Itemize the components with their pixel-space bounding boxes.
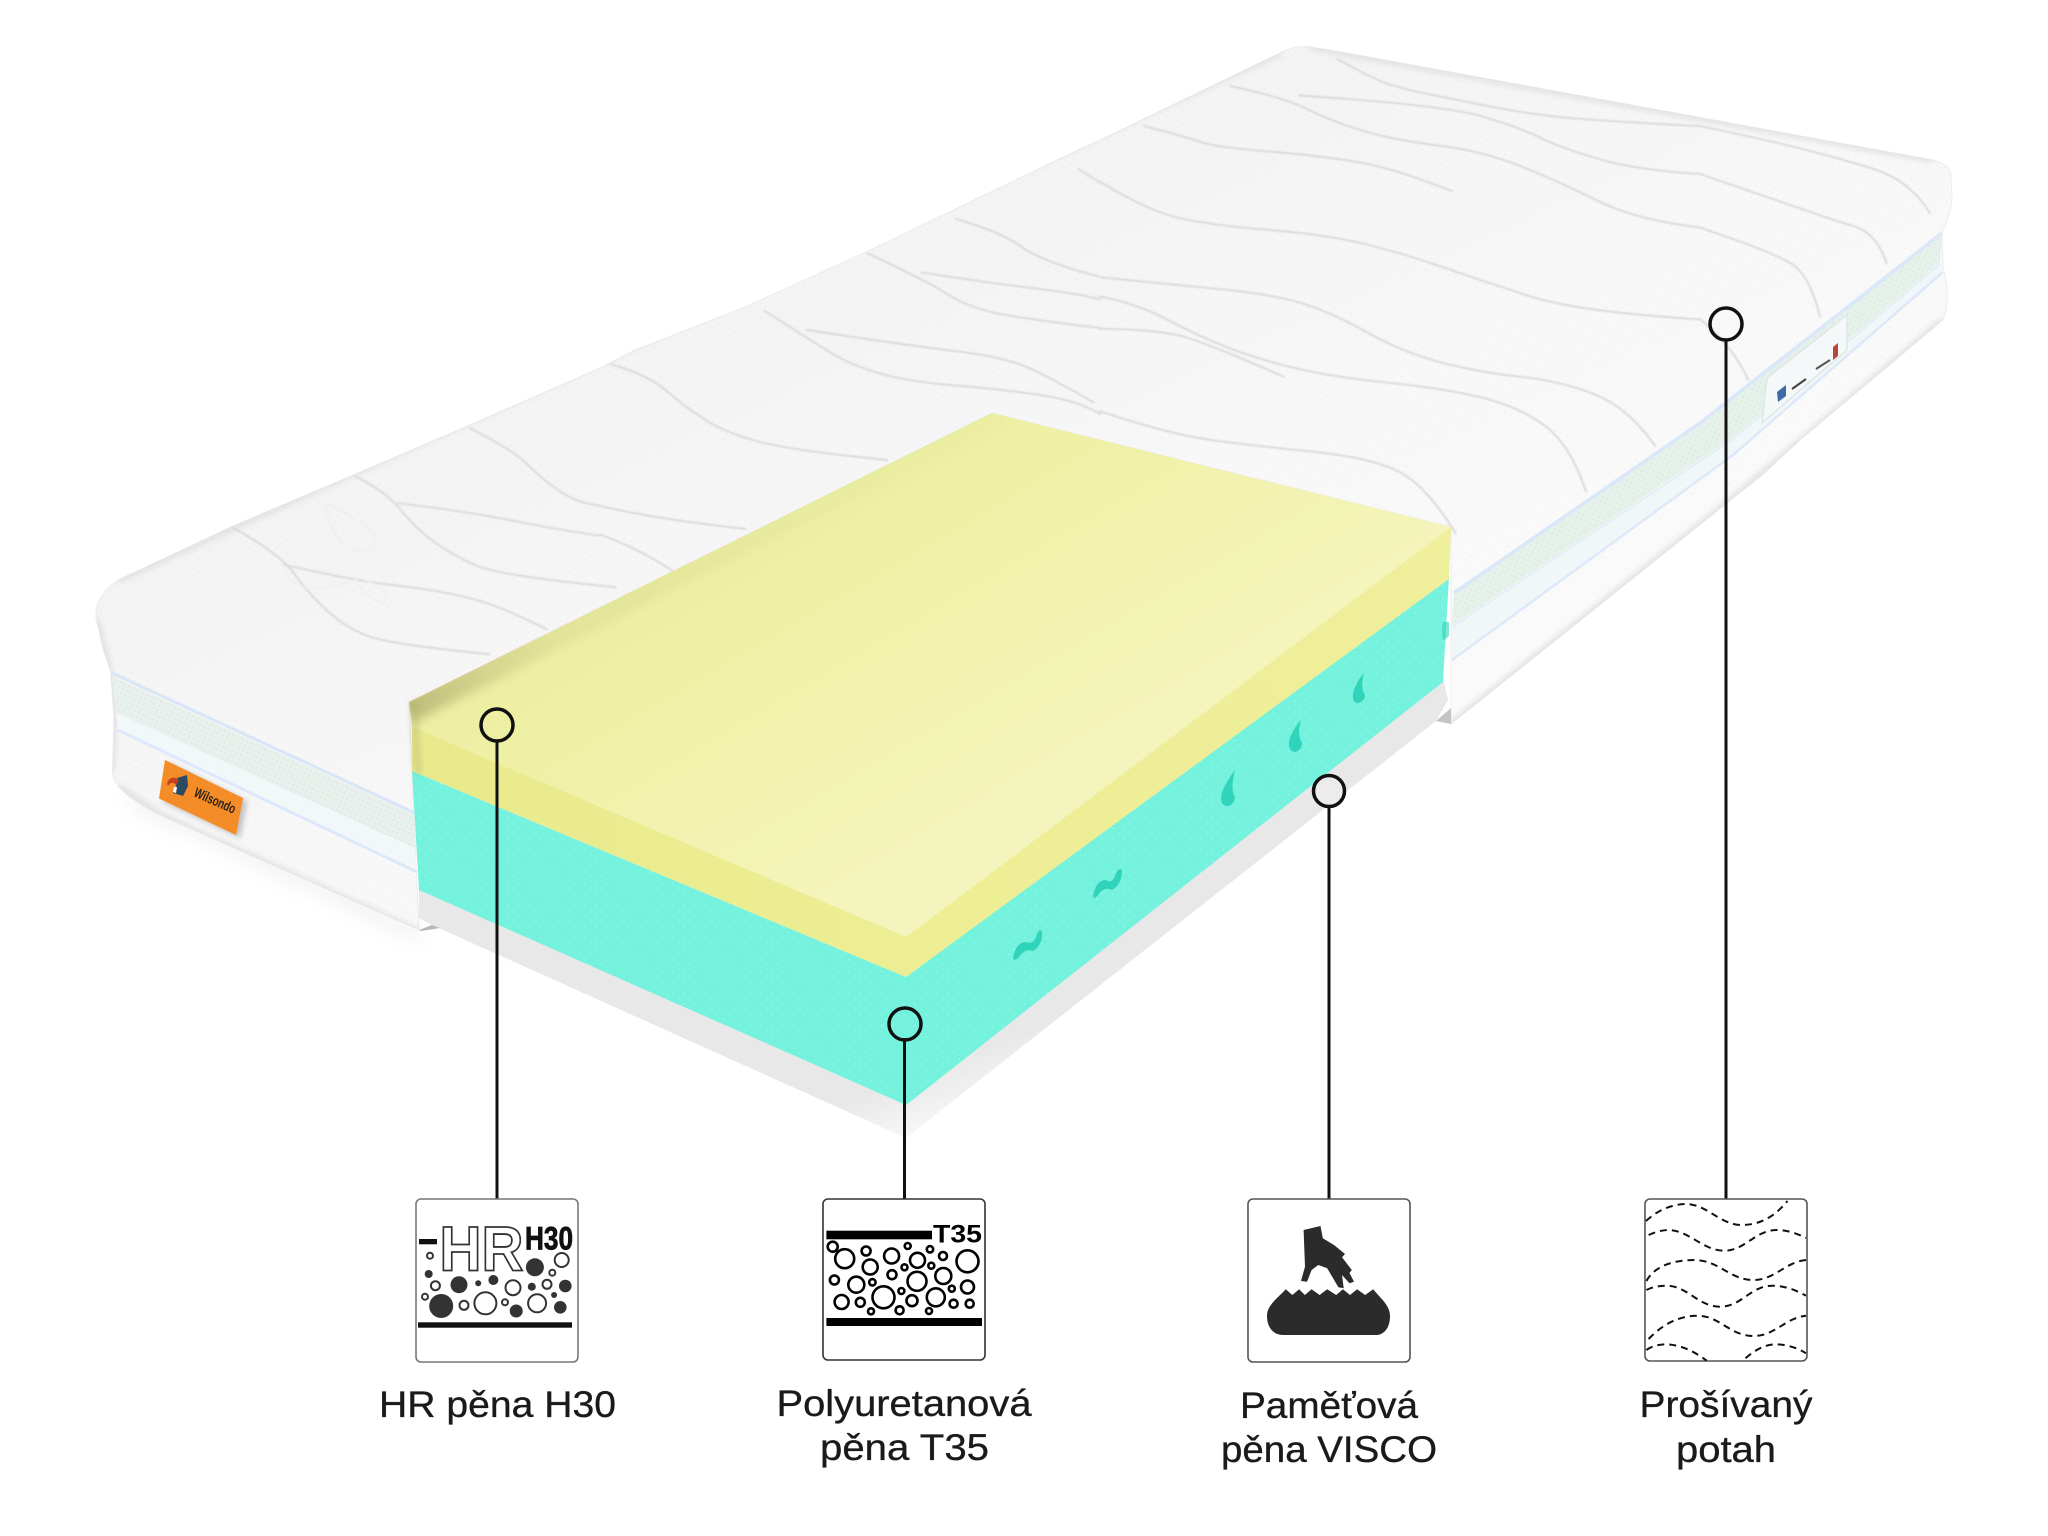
back edge shadow on top face (409, 588, 648, 724)
care tag on side (1762, 315, 1847, 423)
panel: memory foam VISCO (1221, 1199, 1437, 1470)
icon: T35 foam: T35 (933, 1220, 982, 1248)
quilting wave lines (233, 59, 1930, 654)
icon: hand pressing memory foam (1248, 1199, 1410, 1362)
label: Polyuretanová pěna T35 (776, 1383, 1032, 1468)
foam holes (1013, 622, 1449, 960)
icon: T35 foam (823, 1199, 985, 1360)
panel: HR foam H30 (379, 1199, 616, 1425)
cutaway: yellow HR foam side band (412, 527, 1451, 977)
callout: memory foam marker (1314, 776, 1344, 1200)
label: Prošívaný potah: Prošívaný (1640, 1384, 1813, 1425)
cutaway: yellow top face (409, 413, 1451, 937)
icon: toucan logo (167, 775, 188, 796)
callout: quilted cover marker (1710, 308, 1742, 1200)
icon: quilted stitching (1645, 1199, 1807, 1361)
cutaway: turquoise polyurethane layer (412, 577, 1449, 1105)
label: Polyuretanová pěna T35: Polyuretanová (776, 1383, 1032, 1424)
mattress soft ground shadow (130, 800, 420, 935)
left side zipper band (112, 673, 417, 872)
label: Polyuretanová pěna T35: pěna T35 (820, 1427, 989, 1468)
icon: HR H30 foam: H30 (525, 1220, 573, 1256)
panel: quilted cover (1640, 1199, 1813, 1470)
label: Prošívaný potah (1640, 1384, 1813, 1470)
callout: polyurethane foam marker (889, 1008, 921, 1200)
label: Paměťová pěna VISCO: Paměťová (1240, 1385, 1418, 1426)
cover texture and shading (90, 40, 1960, 940)
label: HR pěna H30: HR pěna H30 (379, 1384, 616, 1425)
right side zipper band (1452, 233, 1943, 660)
label: Paměťová pěna VISCO (1221, 1385, 1437, 1470)
label: Paměťová pěna VISCO: pěna VISCO (1221, 1429, 1437, 1470)
callout: HR foam marker (481, 709, 513, 1200)
icon: HR H30 foam (416, 1199, 578, 1362)
icon: HR H30 foam: HR (440, 1214, 524, 1284)
mattress illustration (90, 40, 1960, 1138)
panel: polyurethane foam T35 (776, 1199, 1032, 1468)
callout lines and markers (481, 308, 1742, 1200)
label: Prošívaný potah: potah (1676, 1429, 1776, 1470)
orange brand label (159, 760, 247, 838)
cut edge shadow on left wall (409, 700, 422, 775)
mattress cover body (96, 47, 1952, 930)
cutaway: white base foam layer (419, 678, 1451, 1138)
orange brand label: Wilsondo (192, 784, 238, 817)
